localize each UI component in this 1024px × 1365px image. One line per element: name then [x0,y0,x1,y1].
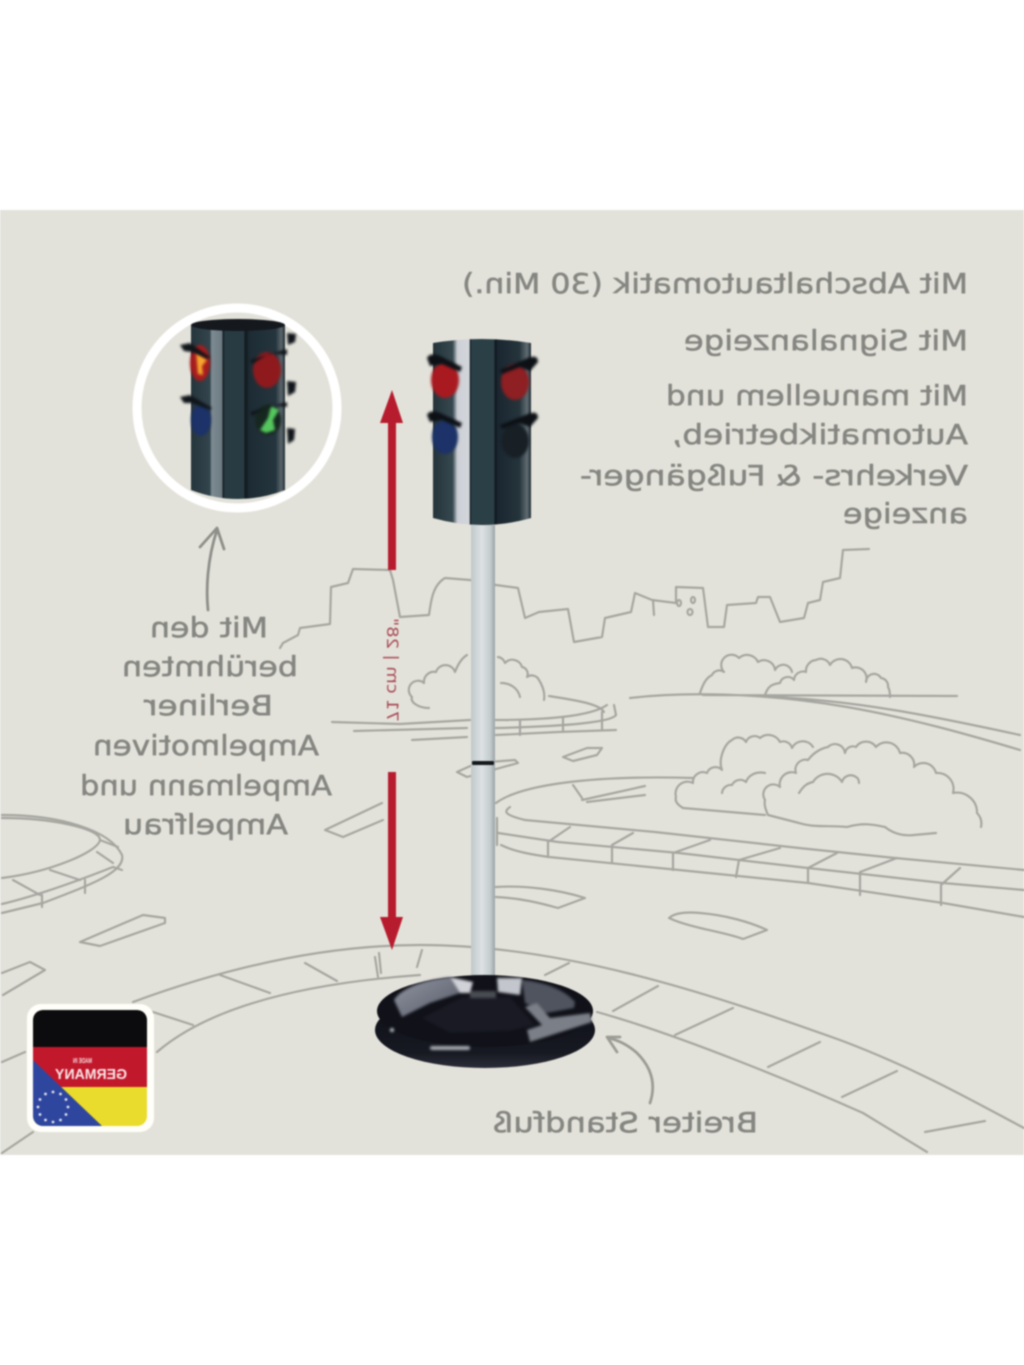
sketch: curved curb right [496,777,1024,917]
pedestal base [375,975,595,1068]
traffic light head [427,339,538,525]
lamp: blue [191,404,211,436]
lamp hoods [427,354,538,429]
badge: made in Germany [27,1004,154,1132]
feature text: operating modes: anzeige [843,497,968,530]
inset circle: lit signals [137,308,337,508]
feature text: Berlin traffic light figures: Berliner [143,689,273,722]
lamp hoods and side nubs [180,333,296,444]
height dimension: lower red arrow [380,772,403,950]
feature text: wide base: Breiter Standfuß [493,1106,758,1139]
feature text: operating modes [580,379,968,530]
feature text: operating modes: Verkehrs- & Fußgänger- [580,459,968,492]
feature text: Berlin traffic light figures: Ampelmotiven [93,729,319,762]
lamp: right red [501,364,529,400]
lamp: right red [253,352,281,388]
height label: 71 cm | 28" [383,618,402,722]
sketch: foreground roundabout [2,945,1024,1153]
lamp: left blue [432,420,458,454]
lamp: green walking figure [255,405,281,435]
height dimension: upper red arrow [380,390,403,570]
lamp: left red [431,362,459,398]
feature text: operating modes: Automatikbetrieb, [672,418,968,451]
annotation arrow: to inset [200,528,224,610]
sketch: large bushes [676,735,981,835]
EU stars [37,1091,69,1123]
feature text: automatic shutoff: Mit Abschaltautomatik (30 Min.) [462,267,968,300]
feature text: operating modes: Mit manuellem und [666,379,968,412]
sketch: bushes and far road [332,655,1020,750]
badge: made in Germany: GERMANY [55,1066,127,1083]
feature text: Berlin traffic light figures [80,611,332,841]
annotation arrow: to base [607,1037,653,1103]
background panel [0,210,1024,1155]
main scene [0,210,1024,1155]
feature text: Berlin traffic light figures: berühmten [122,650,298,683]
sketch: road dashes [2,748,767,995]
feature text: signal display: Mit Signalanzeige [684,324,968,357]
lamp: orange walking figure [190,345,210,381]
sketch: city skyline [280,549,869,648]
feature text: Berlin traffic light figures: Ampelfrau [123,808,288,841]
sketch: left roundabout curb [2,815,122,913]
feature text: Berlin traffic light figures: Mit den [150,611,268,644]
badge text: MADE IN [73,1058,92,1065]
feature text: Berlin traffic light figures: Ampelmann und [80,769,332,802]
lamp: right dark [501,424,529,458]
traffic light pole [471,525,495,990]
